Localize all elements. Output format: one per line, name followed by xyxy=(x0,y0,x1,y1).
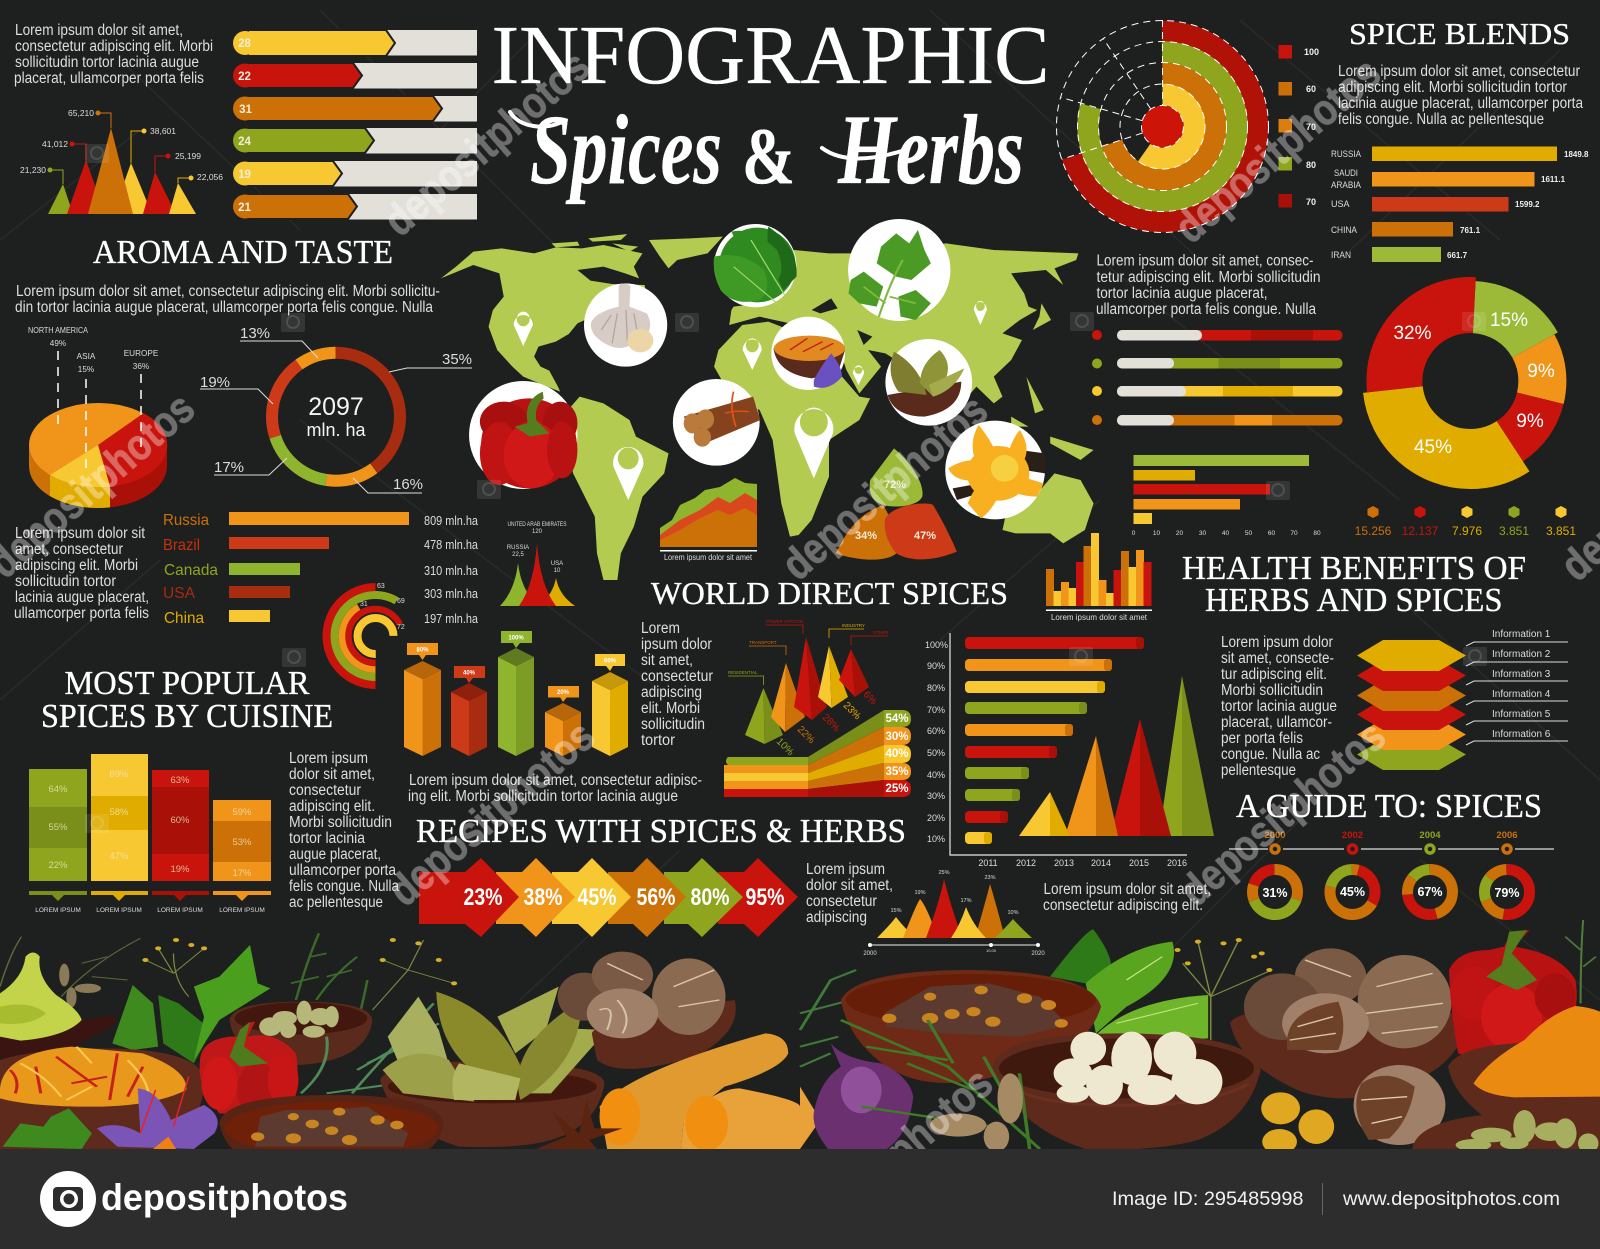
text block: world direct spices: sit amet, xyxy=(641,652,693,669)
spice icon: vanilla flower xyxy=(945,421,1045,519)
text block: health benefits: sit amet, consecte- xyxy=(1221,650,1334,667)
text block: left column xyxy=(14,525,149,622)
chart: stacked bars by cuisine: 47% xyxy=(109,851,129,862)
chart: ribbon percent bands: 25% xyxy=(885,783,909,795)
chart: donut 2097 mln ha: mln. ha xyxy=(306,420,367,440)
text block: world direct spices: Lorem xyxy=(641,620,680,637)
text block: recipes: dolor sit amet, xyxy=(806,877,893,894)
chart: stacked hexagon layers: Information 6 xyxy=(1492,729,1551,740)
watermarks: depositphotos xyxy=(379,711,604,916)
text block: cuisine: felis congue. Nulla xyxy=(289,878,399,895)
chart: bell curve peaks with axis xyxy=(863,870,1045,957)
chart: 3D isometric columns: 20% xyxy=(557,690,570,696)
chart: stacked hexagon layers: Information 2 xyxy=(1492,649,1551,660)
text block: right middle xyxy=(1096,252,1320,318)
chart: horizontal bars with axis: 30 xyxy=(1199,530,1206,537)
chart: 3D isometric columns xyxy=(404,631,628,756)
chart: UAE Russia USA peaks: UNITED ARAB EMIRATES xyxy=(508,522,566,528)
text block: intro top left: Lorem ipsum dolor sit amet, xyxy=(15,22,183,39)
chart: guide donuts: 45% xyxy=(1340,885,1365,899)
text block: under columns xyxy=(408,772,702,805)
heading: a guide to spices: A GUIDE TO: SPICES xyxy=(1236,788,1542,825)
chart: timeline xyxy=(1229,830,1554,853)
chart: faceted pyramids: 6% xyxy=(861,689,879,707)
chart: 3D pie by region: NORTH AMERICA xyxy=(28,326,88,335)
chart: percentage arrow strip: 45% xyxy=(578,884,616,911)
text block: health benefits: per porta felis xyxy=(1221,730,1303,747)
spice icon: saffron bowl xyxy=(771,317,845,390)
chart: combined bars and triangles by year: 40% xyxy=(927,770,945,780)
chart: country bars mln ha: Russia xyxy=(163,512,209,529)
chart: percentage arrow strip: 80% xyxy=(690,884,730,911)
chart: spice blends country bars: IRAN xyxy=(1331,250,1351,260)
text block: left column: Lorem ipsum dolor sit xyxy=(15,525,146,542)
chart: percentage arrow strip: 23% xyxy=(464,884,502,911)
chart: mountain peaks top left: 21,230 xyxy=(20,165,46,175)
chart: stacked bars by cuisine: 63% xyxy=(170,775,190,786)
text block: world direct spices: consectetur xyxy=(641,668,713,685)
text block: cuisine: consectetur xyxy=(289,782,361,799)
chart: big exploded donut: 45% xyxy=(1414,437,1452,458)
chart: faceted pyramids: TRANSPORT xyxy=(749,640,777,645)
legend: hexagon values: 12.137 xyxy=(1402,524,1439,538)
chart: bell curve peaks with axis: 2000 xyxy=(863,951,877,957)
heading: most popular spices by cuisine: SPICES BY CUISINE xyxy=(41,698,333,735)
title: Herbs xyxy=(837,94,1024,205)
chart: horizontal bars with axis xyxy=(1132,455,1321,537)
chart: horizontal bars with axis: 60 xyxy=(1268,530,1275,537)
text block: left column: ullamcorper porta felis xyxy=(14,605,149,622)
spice icon: bay leaves bowl xyxy=(885,339,972,426)
text block: guide: Lorem ipsum dolor sit amet, xyxy=(1044,881,1211,898)
text block: cuisine xyxy=(289,750,399,911)
watermarks: depositphotos xyxy=(374,41,599,246)
text block: health benefits: Morbi sollicitudin xyxy=(1221,682,1323,699)
title: Spices xyxy=(530,94,722,205)
chart: concentric arcs: 63 xyxy=(377,583,385,590)
illustration: spices and herbs left half xyxy=(0,933,800,1155)
legend: radial rings: 70 xyxy=(1306,122,1316,132)
chart: spice blends country bars: 1611.1 xyxy=(1541,175,1566,184)
chart: country bars mln ha: China xyxy=(164,610,204,627)
footer bar xyxy=(0,1149,1600,1249)
text block: aroma intro xyxy=(15,283,440,316)
spice icon: bell pepper xyxy=(469,381,577,489)
chart: UAE Russia USA peaks: RUSSIA xyxy=(507,545,529,551)
chart: 3D pie by region: 49% xyxy=(50,339,66,348)
chart: three leaf percentages xyxy=(836,448,957,560)
chart: combined bars and triangles by year: 2015 xyxy=(1129,858,1149,868)
spice icon: garlic xyxy=(584,283,667,367)
chart: ribbon percent bands xyxy=(724,710,911,797)
chart: stacked bars by cuisine: 59% xyxy=(232,807,252,818)
chart: country bars mln ha: 197 mln.ha xyxy=(424,611,479,626)
chart: world map with spices: 72% xyxy=(884,479,906,491)
chart: bell curve peaks with axis: 19% xyxy=(914,890,926,896)
chart: ribbon percent bands: 30% xyxy=(885,731,909,743)
chart: percentage arrow strip: 95% xyxy=(746,884,784,911)
text block: cuisine: ullamcorper porta xyxy=(289,862,396,879)
chart: percentage arrow strip: 38% xyxy=(524,884,562,911)
illustration: spices and herbs right half xyxy=(800,920,1600,1154)
chart: big exploded donut xyxy=(1392,303,1555,459)
chart: faceted pyramids: 22% xyxy=(795,724,817,746)
chart: stacked bars by cuisine: LOREM IPSUM xyxy=(35,907,81,914)
chart: mountain peaks top left: 22,056 xyxy=(197,172,223,182)
chart: stacked bars by cuisine: 22% xyxy=(48,860,68,871)
chart: donut 2097 mln ha xyxy=(200,325,472,493)
chart: UAE Russia USA peaks: 22,5 xyxy=(512,552,524,558)
chart: stacked hexagon layers: Information 4 xyxy=(1492,689,1551,700)
text block: health benefits: placerat, ullamcor- xyxy=(1221,714,1332,731)
chart: 3D pie by region: EUROPE xyxy=(124,349,159,358)
text block: world direct spices: elit. Morbi xyxy=(641,700,700,717)
chart: combined bars and triangles by year: 20% xyxy=(927,813,945,823)
chart: concentric arcs: 31 xyxy=(360,601,368,608)
chart: country bars mln ha xyxy=(163,512,479,627)
text block: cuisine: augue placerat, xyxy=(289,846,381,863)
chart: faceted pyramids xyxy=(728,619,890,758)
chart: stacked bars by cuisine: 60% xyxy=(170,815,190,826)
chart: concentric arcs: 69 xyxy=(397,598,405,605)
text block: cuisine: ac pellentesque xyxy=(289,894,383,911)
chart: concentric arcs: 72 xyxy=(397,624,405,631)
chart: horizontal bars with axis: 0 xyxy=(1132,530,1136,537)
chart: combined bars and triangles by year: 100% xyxy=(925,640,948,650)
chart: horizontal bars with axis: 20 xyxy=(1176,530,1183,537)
chart: stacked bars by cuisine: LOREM IPSUM xyxy=(219,907,265,914)
chart: spice blends country bars: USA xyxy=(1331,199,1350,209)
heading: health benefits: HERBS AND SPICES xyxy=(1205,582,1502,619)
footer bar: depositphotos xyxy=(101,1177,348,1218)
chart: mountain peaks top left: 41,012 xyxy=(42,139,68,149)
chart: stacked bars by cuisine: 58% xyxy=(109,807,129,818)
chart: timeline: 2002 xyxy=(1342,830,1363,841)
chart: UAE Russia USA peaks: USA xyxy=(551,561,563,567)
chart: stacked hexagon layers: Information 5 xyxy=(1492,709,1551,720)
chart: bell curve peaks with axis: 10% xyxy=(1007,910,1019,916)
chart: spice blends country bars: 761.1 xyxy=(1460,226,1481,235)
chart: timeline: 2006 xyxy=(1496,830,1518,841)
chart: stacked bars by cuisine xyxy=(29,754,271,914)
chart: country bars mln ha: 478 mln.ha xyxy=(424,537,479,552)
chart: stacked bar small xyxy=(1046,533,1152,622)
text block: spice blends xyxy=(1338,63,1583,128)
chart: stacked bar small: Lorem ipsum dolor sit amet xyxy=(1051,612,1148,622)
chart: ribbon percent bands: 35% xyxy=(885,766,909,778)
spice icon: spinach xyxy=(714,224,797,307)
chart: bell curve peaks with axis: 15% xyxy=(890,908,902,914)
text block: world direct spices: ipsum dolor xyxy=(641,636,712,653)
footer bar: Image ID: 295485998 xyxy=(1112,1189,1304,1210)
chart: big exploded donut: 9% xyxy=(1516,411,1544,432)
chart: stacked hexagon layers: Information 3 xyxy=(1492,669,1551,680)
text block: intro top left: sollicitudin tortor lacinia augue xyxy=(15,54,199,71)
text block: left column: lacinia augue placerat, xyxy=(15,589,149,606)
text block: cuisine: Lorem ipsum xyxy=(289,750,368,767)
chart: guide donuts xyxy=(1252,870,1530,914)
text block: right middle: tortor lacinia augue placerat, xyxy=(1096,285,1268,302)
legend: hexagon values: 3.851 xyxy=(1499,524,1529,538)
title: INFOGRAPHIC xyxy=(492,9,1050,102)
chart: guide donuts: 31% xyxy=(1262,886,1288,900)
chart: stacked bars by cuisine: 17% xyxy=(232,868,252,879)
chart: horizontal bars with axis: 80 xyxy=(1313,530,1321,537)
chart: 3D isometric columns: 60% xyxy=(604,658,617,664)
chart: horizontal bars with axis: 70 xyxy=(1290,530,1298,537)
text block: spice blends: adipiscing elit. Morbi sollicitudin tortor xyxy=(1338,79,1567,96)
legend: hexagon values: 15.256 xyxy=(1355,524,1392,538)
chart: ribbon percent bands: 40% xyxy=(885,748,909,760)
chart: 3D isometric columns: 100% xyxy=(508,636,524,642)
chart: spice blends country bars: RUSSIA xyxy=(1331,149,1361,159)
chart: arrow progress bars top xyxy=(233,30,477,220)
chart: world map with spices: 47% xyxy=(914,530,936,542)
chart: faceted pyramids: POWER STATION xyxy=(766,619,803,624)
chart: bell curve peaks with axis: 10.00 xyxy=(986,948,997,953)
text block: health benefits: Lorem ipsum dolor xyxy=(1221,634,1333,651)
watermarks: depositphotos xyxy=(772,385,997,590)
chart: spice blends country bars xyxy=(1331,146,1589,262)
chart: 3D pie by region: ASIA xyxy=(77,352,96,361)
chart: arrow progress bars top: 22 xyxy=(238,71,251,83)
chart: faceted pyramids: 23% xyxy=(841,700,863,722)
spice icon: parsley xyxy=(848,219,950,321)
chart: horizontal bars with axis: 50 xyxy=(1245,530,1252,537)
chart: combined bars and triangles by year xyxy=(925,633,1214,868)
chart: donut 2097 mln ha: 19% xyxy=(200,374,230,391)
chart: faceted pyramids: 28% xyxy=(820,712,842,734)
heading: most popular spices by cuisine: MOST POPULAR xyxy=(64,665,310,702)
chart: area chart on map: Lorem ipsum dolor sit amet xyxy=(664,552,753,562)
chart: donut 2097 mln ha: 17% xyxy=(214,459,244,476)
legend: radial rings: 100 xyxy=(1304,47,1319,57)
chart: combined bars and triangles by year: 2012 xyxy=(1016,858,1036,868)
chart: UAE Russia USA peaks xyxy=(500,522,575,606)
legend: radial rings: 70 xyxy=(1306,197,1316,207)
chart: mountain peaks top left xyxy=(20,108,223,214)
chart: stacked bars by cuisine: 64% xyxy=(48,784,68,795)
chart: spice blends country bars: SAUDI xyxy=(1334,168,1358,178)
chart: mountain peaks top left: 65,210 xyxy=(68,108,94,118)
chart: 3D pie by region: 36% xyxy=(133,362,149,371)
text block: recipes: Lorem ipsum xyxy=(806,861,885,878)
chart: concentric arcs xyxy=(326,583,424,685)
chart: donut 2097 mln ha: 2097 xyxy=(308,393,364,421)
chart: country bars mln ha: Brazil xyxy=(163,537,200,554)
chart: arrow progress bars top: 24 xyxy=(238,136,251,148)
chart: ribbon percent bands: 54% xyxy=(885,713,909,725)
chart: arrow progress bars top: 28 xyxy=(238,38,251,50)
heading: world direct spices: WORLD DIRECT SPICES xyxy=(651,575,1008,611)
chart: donut 2097 mln ha: 35% xyxy=(442,351,472,368)
text block: health benefits: congue. Nulla ac xyxy=(1221,746,1320,763)
chart: spice blends country bars: CHINA xyxy=(1331,225,1357,235)
chart: bell curve peaks with axis: 2020 xyxy=(1031,951,1045,957)
chart: faceted pyramids: OTHER xyxy=(873,630,890,635)
chart: donut 2097 mln ha: 16% xyxy=(393,476,423,493)
chart: mountain peaks top left: 25,199 xyxy=(175,151,201,161)
text block: world direct spices: sollicitudin xyxy=(641,716,705,733)
chart: country bars mln ha: 809 mln.ha xyxy=(424,513,479,528)
chart: faceted pyramids: INDUSTRY xyxy=(842,623,865,628)
text block: world direct spices: tortor xyxy=(641,732,675,749)
chart: world map with spices xyxy=(441,219,1094,580)
chart: arrow progress bars top: 21 xyxy=(238,202,251,214)
text block: health benefits: pellentesque xyxy=(1221,762,1296,779)
heading: health benefits: HEALTH BENEFITS OF xyxy=(1182,550,1526,587)
text block: aroma intro: din tortor lacinia augue placerat, ullamcorper porta felis congue. Nulla xyxy=(15,299,433,316)
chart: bell curve peaks with axis: 17% xyxy=(960,898,972,904)
text block: right middle: tetur adipiscing elit. Morbi sollicitudin xyxy=(1096,269,1320,286)
chart: bell curve peaks with axis: 23% xyxy=(984,875,996,881)
chart: area chart on map xyxy=(660,478,757,562)
chart: faceted pyramids: RESIDENTIAL xyxy=(728,670,758,675)
pins on map xyxy=(514,301,987,500)
chart: horizontal bars with axis: 40 xyxy=(1222,530,1229,537)
chart: spice blends country bars: 661.7 xyxy=(1447,251,1468,260)
logo icon: camera xyxy=(40,1171,96,1227)
chart: combined bars and triangles by year: 30% xyxy=(927,791,945,801)
chart: donut 2097 mln ha: 13% xyxy=(240,325,270,342)
heading: spice blends: SPICE BLENDS xyxy=(1349,16,1570,51)
watermarks: depositphotos xyxy=(1165,48,1390,253)
chart: combined bars and triangles by year: 60% xyxy=(927,726,945,736)
chart: timeline: 2000 xyxy=(1264,830,1286,841)
chart: stacked bars by cuisine: 53% xyxy=(232,837,252,848)
chart: big exploded donut: 32% xyxy=(1393,323,1432,344)
chart: 3D pie by region: 15% xyxy=(78,365,94,374)
text block: under columns: ing elit. Morbi sollicitudin tortor lacinia augue xyxy=(408,788,678,805)
chart: big exploded donut: 15% xyxy=(1490,310,1528,331)
chart: stacked bars by cuisine: 69% xyxy=(109,769,129,780)
chart: rounded progress bars xyxy=(1092,330,1342,426)
heading: recipes with spices and herbs: RECIPES WITH SPICES & HERBS xyxy=(416,813,906,850)
chart: country bars mln ha: 310 mln.ha xyxy=(424,563,479,578)
chart: radial rings xyxy=(1056,20,1268,232)
text block: health benefits: tur adipiscing elit. xyxy=(1221,666,1327,683)
text block: recipes xyxy=(806,861,893,926)
chart: stacked bars by cuisine: 55% xyxy=(48,822,68,833)
chart: combined bars and triangles by year: 80% xyxy=(927,683,945,693)
text block: spice blends: felis congue. Nulla ac pellentesque xyxy=(1338,111,1544,128)
text block: left column: sollicitudin tortor xyxy=(15,573,116,590)
chart: faceted pyramids: 10% xyxy=(774,736,796,758)
chart: combined bars and triangles by year: 70% xyxy=(927,705,945,715)
chart: combined bars and triangles by year: 50% xyxy=(927,748,945,758)
heading: aroma and taste: AROMA AND TASTE xyxy=(93,234,393,271)
chart: combined bars and triangles by year: 90% xyxy=(927,661,945,671)
chart: 3D isometric columns: 40% xyxy=(463,670,476,676)
legend: hexagon values xyxy=(1355,506,1576,538)
chart: combined bars and triangles by year: 2014 xyxy=(1091,858,1111,868)
chart: arrow progress bars top: 31 xyxy=(239,104,252,116)
chart: spice blends country bars: 1599.2 xyxy=(1515,200,1540,209)
text block: world direct spices: adipiscing xyxy=(641,684,702,701)
chart: stacked bars by cuisine: LOREM IPSUM xyxy=(96,907,142,914)
heading: health benefits xyxy=(1182,550,1526,619)
chart: country bars mln ha: 303 mln.ha xyxy=(424,586,479,601)
chart: country bars mln ha: USA xyxy=(163,585,195,602)
chart: big exploded donut: 9% xyxy=(1527,361,1555,382)
text block: left column: amet, consectetur xyxy=(15,541,123,558)
chart: 3D isometric columns: 80% xyxy=(416,648,429,654)
legend: radial rings: 80 xyxy=(1306,160,1316,170)
text block: intro top left: placerat, ullamcorper porta felis xyxy=(14,70,204,87)
text block: recipes: consectetur xyxy=(806,893,877,910)
chart: 3D pie by region xyxy=(28,326,167,508)
chart: country bars mln ha: Canada xyxy=(164,562,218,579)
chart: stacked bars by cuisine: 19% xyxy=(170,864,190,875)
chart: percentage arrow strip xyxy=(419,858,798,937)
footer bar: www.depositphotos.com xyxy=(1342,1189,1560,1210)
text block: guide: consectetur adipiscing elit. xyxy=(1043,897,1203,914)
text block: cuisine: dolor sit amet, xyxy=(289,766,375,783)
text block: aroma intro: Lorem ipsum dolor sit amet, consectetur adipiscing elit. Morbi sollicitu- xyxy=(16,283,440,300)
text block: recipes: adipiscing xyxy=(806,909,867,926)
legend: radial rings xyxy=(1278,45,1319,208)
chart: timeline: 2004 xyxy=(1419,830,1441,841)
legend: radial rings: 60 xyxy=(1306,84,1316,94)
chart: guide donuts: 79% xyxy=(1494,886,1520,900)
chart: spice blends country bars: 1849.8 xyxy=(1564,150,1589,159)
watermarks: depositphotos xyxy=(1170,711,1395,916)
text block: under columns: Lorem ipsum dolor sit amet, consectetur adipisc- xyxy=(409,772,702,789)
chart: percentage arrow strip: 56% xyxy=(636,884,676,911)
text block: cuisine: tortor lacinia xyxy=(289,830,365,847)
text block: left column: adipiscing elit. Morbi xyxy=(15,557,138,574)
text block: cuisine: adipiscing elit. xyxy=(289,798,375,815)
text block: intro top left: consectetur adipiscing elit. Morbi xyxy=(15,38,213,55)
chart: combined bars and triangles by year: 10% xyxy=(927,834,945,844)
spice icon: cinnamon xyxy=(673,379,760,466)
chart: combined bars and triangles by year: 2011 xyxy=(978,858,998,868)
chart: combined bars and triangles by year: 2016 xyxy=(1167,858,1187,868)
chart: horizontal bars with axis: 10 xyxy=(1153,530,1160,537)
text block: world direct spices xyxy=(641,620,713,749)
chart: combined bars and triangles by year: 2013 xyxy=(1054,858,1074,868)
chart: UAE Russia USA peaks: 120 xyxy=(532,529,543,535)
text block: health benefits: tortor lacinia augue xyxy=(1221,698,1337,715)
title: & xyxy=(742,113,795,201)
text block: guide xyxy=(1043,881,1211,914)
chart: spice blends country bars: ARABIA xyxy=(1331,180,1361,190)
chart: stacked bars by cuisine: LOREM IPSUM xyxy=(157,907,203,914)
chart: arrow progress bars top: 19 xyxy=(238,169,251,181)
text block: intro top left xyxy=(14,22,213,87)
chart: stacked hexagon layers: Information 1 xyxy=(1492,629,1551,640)
text block: health benefits xyxy=(1221,634,1337,779)
chart: bell curve peaks with axis: 25% xyxy=(938,870,950,876)
chart: UAE Russia USA peaks: 10 xyxy=(554,568,561,574)
text block: right middle: Lorem ipsum dolor sit amet, consec- xyxy=(1096,252,1314,270)
legend: hexagon values: 7.976 xyxy=(1452,524,1482,538)
title xyxy=(492,9,1050,205)
chart: guide donuts: 67% xyxy=(1417,885,1443,899)
heading: most popular spices by cuisine xyxy=(41,665,333,735)
chart: world map with spices: 34% xyxy=(855,530,877,542)
chart: stacked hexagon layers xyxy=(1357,629,1568,770)
text block: cuisine: Morbi sollicitudin xyxy=(289,814,392,831)
text block: right middle: ullamcorper porta felis congue. Nulla xyxy=(1096,301,1316,318)
chart: mountain peaks top left: 38,601 xyxy=(150,126,176,136)
legend: hexagon values: 3.851 xyxy=(1546,524,1576,538)
